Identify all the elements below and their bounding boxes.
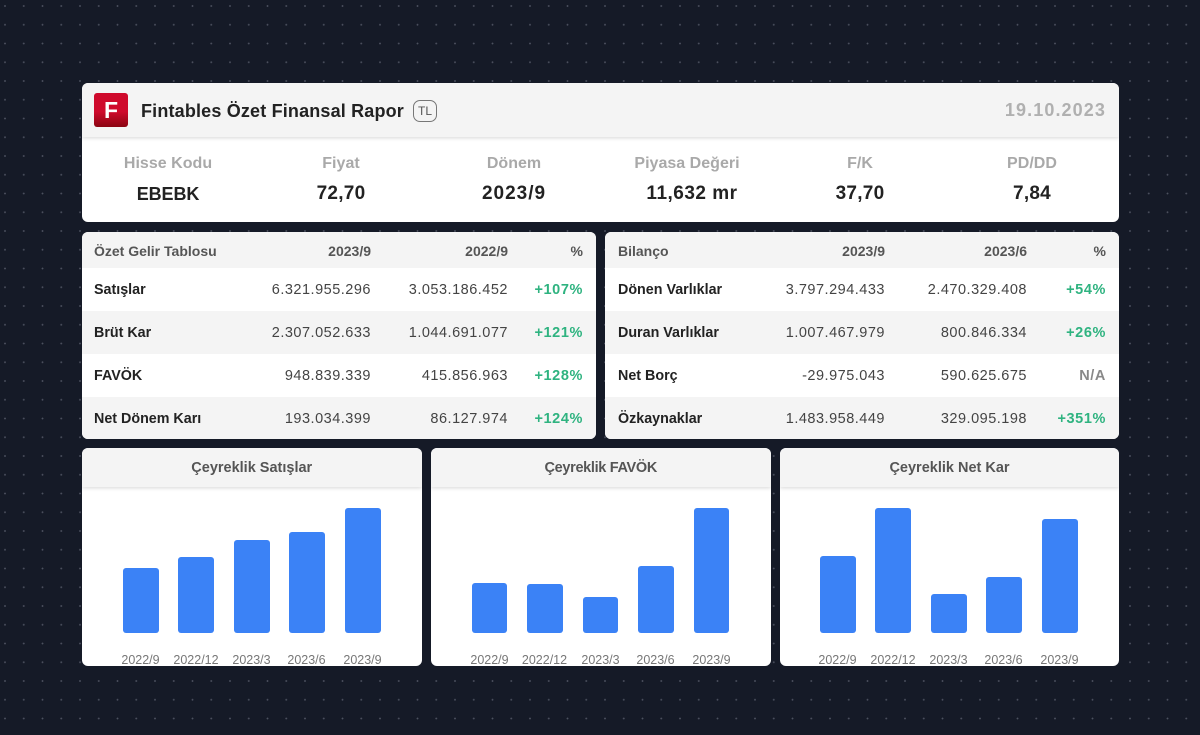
row: Dönen Varlıklar — [618, 282, 1106, 298]
row: Satışlar — [94, 282, 583, 298]
row: Brüt Kar: +121% — [534, 325, 583, 341]
bar chart: FAVÖK — [470, 508, 731, 666]
stat: F/K — [836, 155, 884, 204]
row: Duran Varlıklar: 800.846.334 — [941, 325, 1027, 341]
row: Net Dönem Karı: 193.034.399 — [285, 411, 371, 427]
row: Net Dönem Karı: +124% — [534, 411, 583, 427]
stat: F/K: F/K — [847, 155, 873, 172]
row: Özkaynaklar: Özkaynaklar — [618, 411, 702, 427]
row: Dönen Varlıklar: 2.470.329.408 — [928, 282, 1027, 298]
row: Brüt Kar: Brüt Kar — [94, 325, 151, 341]
row: Net Dönem Karı: Net Dönem Karı — [94, 411, 201, 427]
stat: Piyasa Değeri: 11,632 mr — [646, 183, 738, 204]
row: Dönen Varlıklar: Dönen Varlıklar — [618, 282, 722, 298]
currency badge — [413, 100, 437, 122]
table header: Bilanço — [618, 243, 669, 259]
stat: F/K: 37,70 — [836, 183, 884, 204]
row: Brüt Kar: 2.307.052.633 — [272, 325, 371, 341]
panel: quarterly EBITDA chart — [430, 448, 771, 666]
table header — [82, 232, 596, 268]
row: Duran Varlıklar: Duran Varlıklar — [618, 325, 719, 341]
title: Fintables Özet Finansal Rapor — [141, 101, 404, 121]
table header: % — [571, 243, 583, 259]
chart title — [430, 448, 771, 487]
table header: 2023/6 — [984, 243, 1027, 259]
chart title — [780, 448, 1119, 487]
row: Brüt Kar — [82, 311, 596, 354]
row: Net Borç: -29.975.043 — [802, 368, 885, 384]
panel: income statement table — [82, 232, 596, 439]
panel: quarterly sales chart — [82, 448, 422, 666]
row: FAVÖK: FAVÖK — [94, 368, 142, 384]
row: FAVÖK: +128% — [534, 368, 583, 384]
row: Net Borç: 590.625.675 — [941, 368, 1027, 384]
stat: PD/DD — [1007, 155, 1057, 204]
stat: Fiyat: Fiyat — [322, 155, 360, 172]
row: Duran Varlıklar — [605, 311, 1119, 354]
row: Net Borç — [618, 368, 1106, 384]
row: Brüt Kar: 1.044.691.077 — [409, 325, 508, 341]
row: Satışlar: Satışlar — [94, 282, 146, 298]
row: FAVÖK: 415.856.963 — [422, 368, 508, 384]
row: Satışlar: +107% — [534, 282, 583, 298]
stat: Piyasa Değeri: Piyasa Değeri — [634, 155, 740, 172]
row: Net Dönem Karı — [82, 397, 596, 440]
report date: 19.10.2023 — [1005, 100, 1106, 120]
chart title: Çeyreklik FAVÖK — [545, 460, 657, 476]
bar chart: sales — [121, 508, 382, 666]
row: Net Borç: N/A — [1079, 368, 1106, 384]
panel: report header — [82, 83, 1119, 222]
stat: Dönem — [482, 155, 546, 204]
chart title: Çeyreklik Satışlar — [191, 460, 312, 476]
row: Özkaynaklar — [605, 397, 1119, 440]
row: Özkaynaklar: +351% — [1057, 411, 1106, 427]
stat: Dönem: Dönem — [487, 155, 541, 172]
stat: Hisse Kodu: Hisse Kodu — [124, 155, 212, 172]
table header — [605, 232, 1119, 268]
stat: Hisse Kodu — [124, 155, 212, 204]
chart title — [82, 448, 422, 487]
panel: quarterly net profit chart — [780, 448, 1119, 666]
chart title: Çeyreklik Net Kar — [889, 460, 1010, 476]
row: Duran Varlıklar: 1.007.467.979 — [786, 325, 885, 341]
panel: balance sheet table — [605, 232, 1119, 439]
bar chart: net profit — [818, 508, 1079, 666]
currency badge: TL — [418, 104, 432, 118]
stat: Piyasa Değeri — [634, 155, 740, 204]
row: Dönen Varlıklar: 3.797.294.433 — [786, 282, 885, 298]
icon: Fintables logo — [94, 93, 128, 127]
stat: PD/DD: 7,84 — [1013, 183, 1051, 204]
table header: Özet Gelir Tablosu — [94, 243, 217, 259]
stat: PD/DD: PD/DD — [1007, 155, 1057, 172]
stat: Fiyat: 72,70 — [317, 183, 365, 204]
row: Net Dönem Karı: 86.127.974 — [430, 411, 508, 427]
row: Dönen Varlıklar: +54% — [1066, 282, 1106, 298]
stat: Hisse Kodu: EBEBK — [137, 184, 199, 204]
table header: 2022/9 — [465, 243, 508, 259]
row: Özkaynaklar: 1.483.958.449 — [786, 411, 885, 427]
icon: Fintables logo: F — [104, 97, 118, 123]
stat: Dönem: 2023/9 — [482, 183, 546, 204]
row: Net Borç: Net Borç — [618, 368, 678, 384]
row: Özkaynaklar: 329.095.198 — [941, 411, 1027, 427]
row: FAVÖK — [94, 367, 583, 384]
stat: Fiyat — [317, 155, 365, 204]
title bar — [82, 83, 1119, 137]
table header: % — [1094, 243, 1106, 259]
row: Satışlar: 6.321.955.296 — [272, 282, 371, 298]
table header: 2023/9 — [328, 243, 371, 259]
row: FAVÖK: 948.839.339 — [285, 368, 371, 384]
row: Duran Varlıklar: +26% — [1066, 325, 1106, 341]
table header: 2023/9 — [842, 243, 885, 259]
row: Satışlar: 3.053.186.452 — [409, 282, 508, 298]
